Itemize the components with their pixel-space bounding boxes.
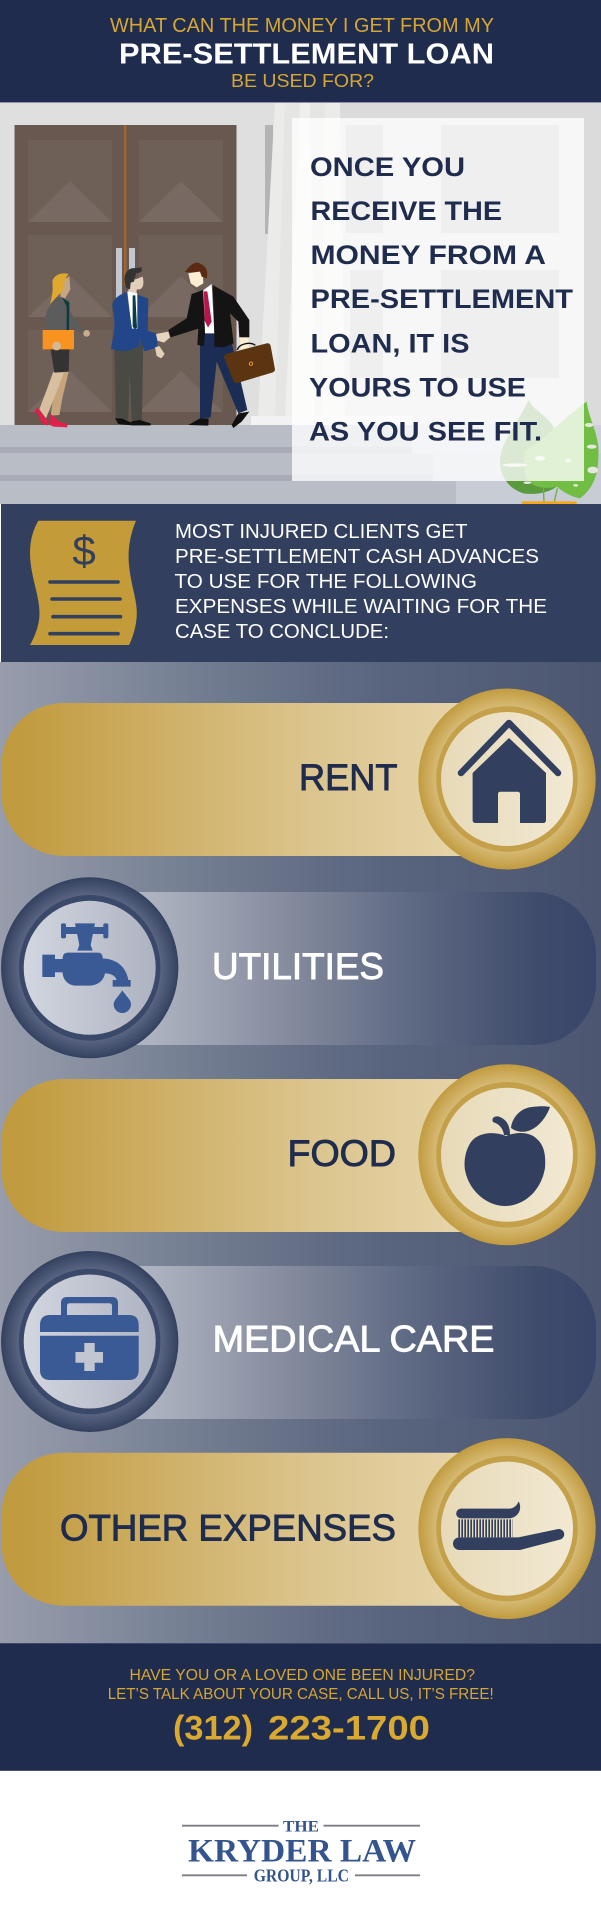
item: utilities [1,877,596,1058]
steps [0,416,601,504]
figure: man in black suit with briefcase [168,263,275,428]
item: medical care [1,1251,596,1432]
panel: call to action [0,1643,601,1771]
panel: header [0,0,601,102]
panel: expenses list [0,662,601,1644]
logo: KRYDER LAW [188,1834,416,1870]
icon: toothbrush [418,1438,596,1619]
phone number: 223-1700 [268,1709,430,1747]
logo [182,1819,420,1886]
statement text: MONEY FROM A [310,240,546,270]
statement text: YOURS TO USE [309,372,526,402]
text panel [292,118,584,481]
label: medical care: MEDICAL CARE [213,1318,494,1360]
icon: house [418,688,596,870]
icon: apple [418,1064,596,1245]
label: utilities: UTILITIES [212,945,384,987]
heading line 1: WHAT CAN THE MONEY I GET FROM MY [110,15,494,37]
item: other expenses [2,1438,596,1619]
figure: man in blue jacket [111,267,170,425]
label: food: FOOD [288,1132,396,1174]
icon: first aid kit [1,1251,178,1432]
logo: THE [283,1819,319,1836]
icon: bill with dollar sign: $ [72,527,96,574]
item: rent [2,688,596,870]
panel: intro band [1,504,601,662]
label: rent: RENT [299,756,398,798]
phone number [173,1709,430,1747]
statement text: ONCE YOU [310,152,465,182]
call to action text: HAVE YOU OR A LOVED ONE BEEN INJURED? [130,1667,475,1684]
icon: bill with dollar sign [30,521,137,645]
window panes [346,125,559,378]
statement text: PRE-SETTLEMENT [310,284,574,314]
intro text: CASE TO CONCLUDE: [175,620,389,643]
intro text: PRE-SETTLEMENT CASH ADVANCES [175,545,539,568]
heading line 3: BE USED FOR? [231,70,374,91]
intro text [174,520,547,643]
figure: woman with folder [33,273,90,427]
statement text [309,152,574,446]
call to action text [108,1667,494,1703]
intro text: TO USE FOR THE FOLLOWING [174,570,477,593]
statement text: RECEIVE THE [310,196,502,226]
phone number: (312) [173,1709,253,1747]
panel: hero illustration [0,102,601,505]
door [14,125,236,425]
intro text: EXPENSES WHILE WAITING FOR THE [175,595,547,618]
statement text: AS YOU SEE FIT. [309,416,542,446]
icon: faucet [1,877,178,1058]
statement text: LOAN, IT IS [310,328,470,358]
logo: GROUP, LLC [254,1866,349,1886]
heading line 2: PRE-SETTLEMENT LOAN [119,38,494,70]
call to action text: LET’S TALK ABOUT YOUR CASE, CALL US, IT’S FREE! [108,1686,494,1703]
label: other expenses: OTHER EXPENSES [60,1507,396,1549]
item: food [2,1064,596,1245]
plant [500,400,599,505]
curtain [258,103,345,420]
intro text: MOST INJURED CLIENTS GET [175,520,468,543]
